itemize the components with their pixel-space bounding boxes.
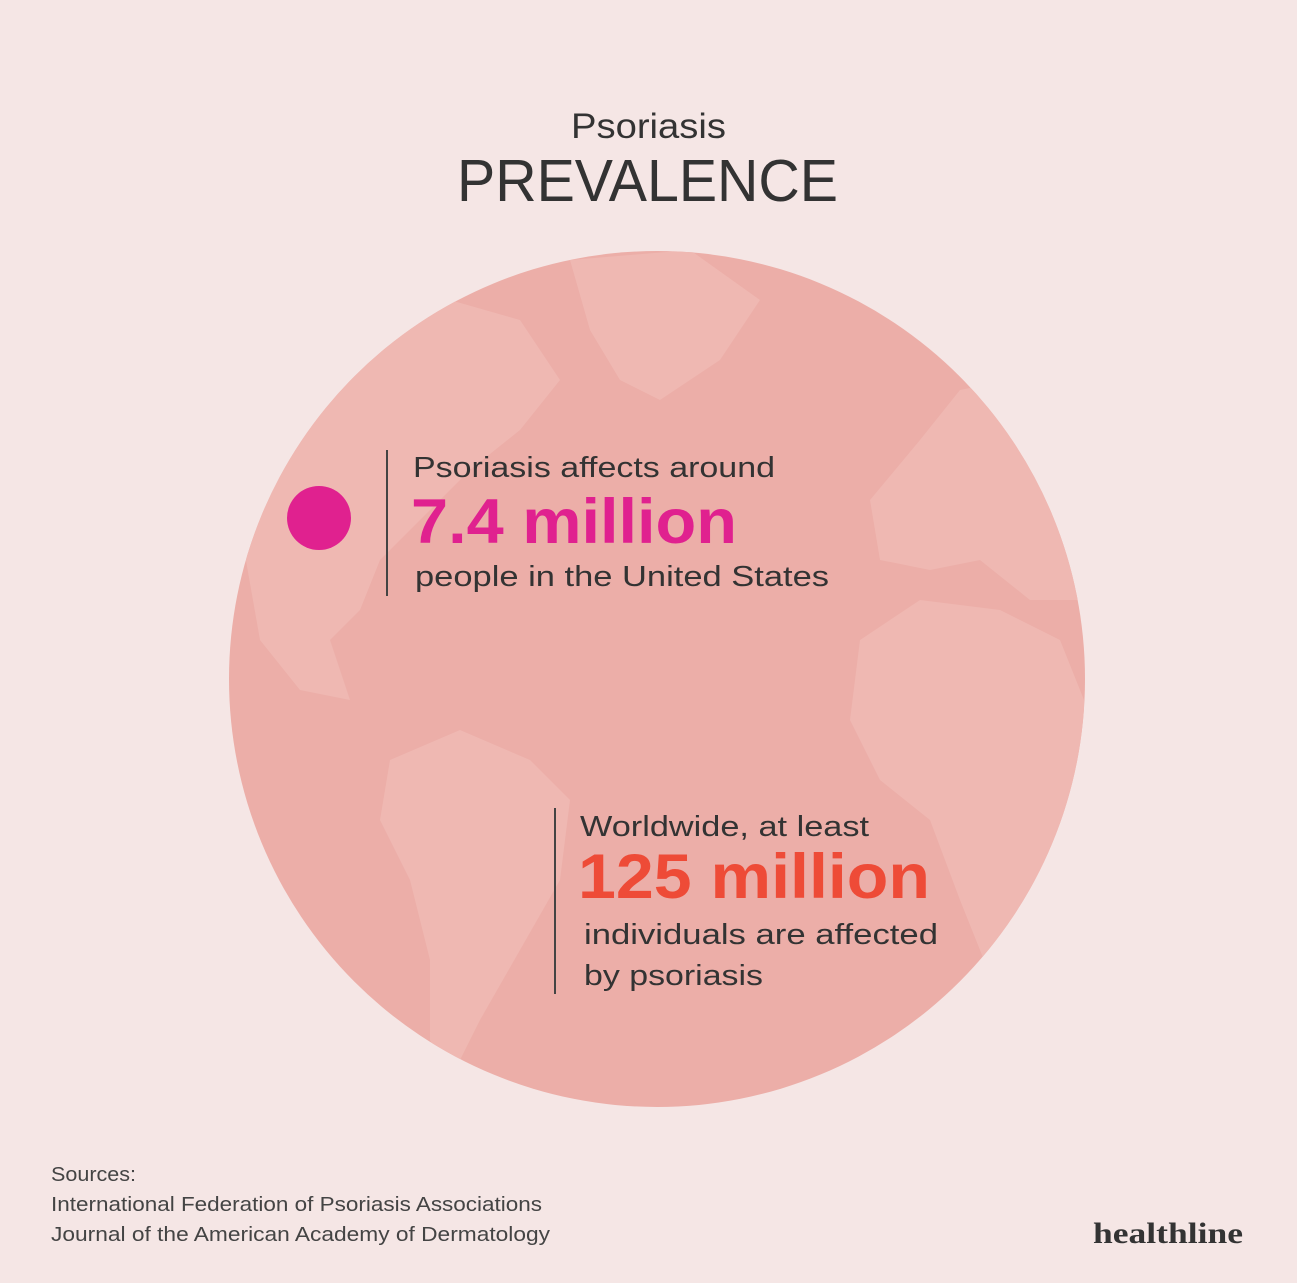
callout: worldwide stat: 125 million [578,842,930,912]
callout: US stat: Psoriasis affects around [413,452,775,484]
sources: International Federation of Psoriasis Associations [51,1194,542,1216]
logo: healthline: healthline [1093,1217,1243,1250]
callout: worldwide stat: Worldwide, at least [580,811,869,843]
sources [51,1164,550,1246]
sources: Sources: [51,1164,136,1186]
callout: worldwide stat: individuals are affected [584,919,938,951]
callout: US stat: people in the United States [415,561,829,593]
title: Psoriasis [571,107,726,146]
title: PREVALENCE [457,148,838,214]
globe [229,250,1085,1107]
sources: Journal of the American Academy of Dermatology [51,1224,550,1246]
callout: US stat: 7.4 million [411,487,737,557]
callout: worldwide stat [554,808,938,994]
icon: US dot [287,486,351,550]
callout: US stat [386,450,829,596]
callout: worldwide stat: by psoriasis [584,960,763,992]
title [457,107,838,214]
